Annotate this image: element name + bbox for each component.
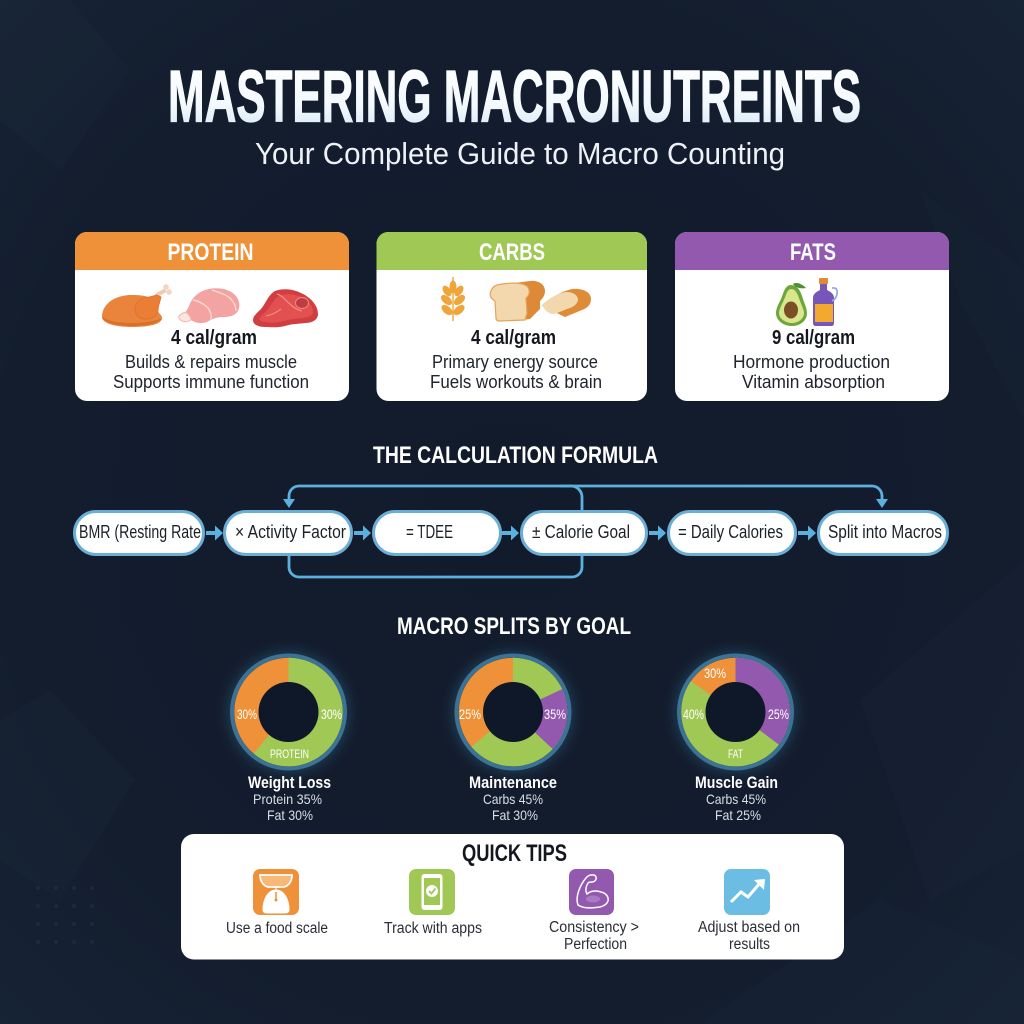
split line 1: Carbs 45%	[706, 791, 766, 807]
goal name: Weight Loss	[248, 773, 331, 792]
tip: consistency: Perfection	[564, 936, 627, 953]
tips heading: QUICK TIPS	[462, 840, 567, 867]
goal name: Maintenance	[469, 773, 557, 792]
donut: muscle gain	[676, 652, 796, 823]
step: TDEE	[374, 512, 500, 554]
panel: carbs	[376, 232, 647, 401]
split line 2: Fat 25%	[715, 807, 761, 823]
icon: bread loaf	[490, 281, 545, 321]
step: daily calories	[668, 512, 796, 554]
calories: 9 cal/gram	[772, 327, 855, 349]
tip: apps	[384, 869, 482, 937]
step: BMR: BMR (Resting Rate	[79, 522, 201, 542]
connector: loop lines	[289, 486, 882, 577]
step: calorie goal	[522, 512, 646, 554]
split line 1: Protein 35%	[253, 791, 322, 807]
calories: 4 cal/gram	[171, 327, 257, 349]
label: 25%	[768, 706, 789, 722]
tip: adjust: results	[729, 936, 770, 953]
protein heading: PROTEIN	[168, 239, 254, 266]
calories: 4 cal/gram	[471, 327, 556, 349]
split line 1: Carbs 45%	[483, 791, 543, 807]
tip: consistency	[549, 869, 639, 953]
icon: pork	[179, 288, 239, 323]
icon: steak	[253, 289, 318, 327]
heading: macro splits: MACRO SPLITS BY GOAL	[397, 613, 631, 640]
arrows: between steps	[206, 526, 816, 540]
fats heading: FATS	[790, 239, 836, 266]
tip: adjust	[698, 869, 800, 953]
label: 40%	[683, 706, 704, 722]
donut: maintenance	[453, 652, 573, 823]
panel: quick tips	[181, 834, 844, 960]
panel: protein	[75, 232, 349, 401]
split line 2: Fat 30%	[492, 807, 538, 823]
tip: scale	[226, 869, 328, 937]
step: TDEE: = TDEE	[406, 522, 453, 542]
icon: bread slice	[542, 289, 591, 317]
tip text: Use a food scale	[226, 920, 328, 937]
label: 25%	[459, 706, 481, 722]
goal name: Muscle Gain	[695, 773, 778, 792]
step: split: Split into Macros	[828, 522, 942, 542]
icon: wheat	[439, 277, 467, 321]
benefit 2: Supports immune function	[113, 372, 309, 392]
carbs heading: CARBS	[479, 239, 545, 266]
benefit 2: Vitamin absorption	[742, 372, 885, 392]
tip text: Consistency >	[549, 919, 639, 936]
benefit 1: Builds & repairs muscle	[125, 352, 297, 372]
label: PROTEIN	[270, 747, 309, 761]
donut: weight loss	[228, 652, 348, 823]
benefit 2: Fuels workouts & brain	[430, 372, 602, 392]
tip text: Adjust based on	[698, 919, 800, 936]
step: activity	[224, 512, 352, 554]
label: 30%	[321, 706, 342, 722]
icon: avocado	[776, 283, 807, 326]
benefit 1: Hormone production	[733, 352, 890, 372]
step: calorie goal: ± Calorie Goal	[532, 522, 630, 542]
step: split	[818, 512, 948, 554]
split line 2: Fat 30%	[267, 807, 313, 823]
label: 35%	[544, 706, 566, 722]
arrow: loop heads	[283, 499, 888, 508]
benefit 1: Primary energy source	[432, 352, 598, 372]
subtitle: Your Complete Guide to Macro Counting	[255, 136, 785, 171]
step: daily calories: = Daily Calories	[678, 522, 783, 542]
icon: oil bottle	[813, 278, 837, 326]
label: 30%	[704, 665, 726, 681]
step: BMR	[74, 512, 204, 554]
step: activity: × Activity Factor	[235, 522, 346, 542]
label: 30%	[237, 706, 257, 722]
tip text: Track with apps	[384, 920, 482, 937]
icon: chicken	[102, 284, 172, 327]
panel: fats	[675, 232, 949, 401]
label: FAT	[728, 747, 743, 761]
heading: formula: THE CALCULATION FORMULA	[373, 442, 658, 469]
flow diagram	[74, 486, 948, 577]
